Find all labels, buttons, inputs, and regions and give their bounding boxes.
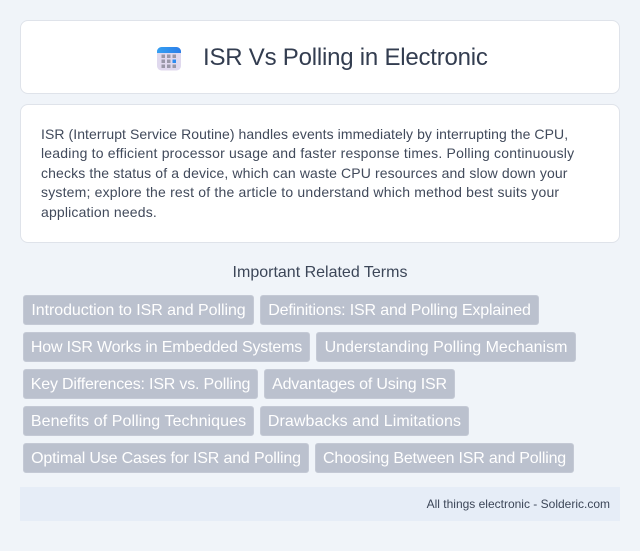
icon: calendar grid: [157, 47, 181, 70]
tag: [316, 332, 576, 362]
tag: Understanding Polling Mechanism: [325, 339, 567, 356]
tag: How ISR Works in Embedded Systems: [31, 339, 302, 356]
tag: [23, 332, 310, 362]
header panel: [20, 20, 620, 94]
tag: Optimal Use Cases for ISR and Polling: [31, 450, 301, 467]
intro text panel: ISR (Interrupt Service Routine) handles events immediately by interrupting the CPU,: [41, 126, 568, 142]
tag list: [23, 295, 576, 473]
heading: related terms: Important Related Terms: [233, 264, 407, 281]
tag: Definitions: ISR and Polling Explained: [268, 302, 531, 319]
tag: Key Differences: ISR vs. Polling: [31, 376, 250, 393]
footer credit: All things electronic - Solderic.com: [427, 497, 610, 511]
title: ISR Vs Polling in Electronic: [203, 44, 488, 71]
intro text panel: leading to efficient processor usage and faster response times. Polling continuously: [41, 145, 574, 161]
tag: Advantages of Using ISR: [272, 376, 447, 393]
tag: [23, 406, 254, 436]
tag: [23, 443, 309, 473]
footer bar: [20, 487, 620, 521]
tag: [23, 369, 258, 399]
tag: [264, 369, 455, 399]
intro text panel: system; explore the rest of the article to understand which method best suits your: [41, 184, 559, 200]
tag: [315, 443, 574, 473]
tag: [260, 295, 539, 325]
tag: Drawbacks and Limitations: [268, 413, 461, 430]
tag: Choosing Between ISR and Polling: [323, 450, 566, 467]
intro text panel: [20, 104, 620, 243]
tag: [260, 406, 469, 436]
intro text panel: application needs.: [41, 204, 157, 220]
tag: [23, 295, 254, 325]
tag: Benefits of Polling Techniques: [31, 413, 246, 430]
intro text panel: checks the status of a device, which can waste CPU resources and slow down your: [41, 165, 568, 181]
tag: Introduction to ISR and Polling: [31, 302, 246, 319]
